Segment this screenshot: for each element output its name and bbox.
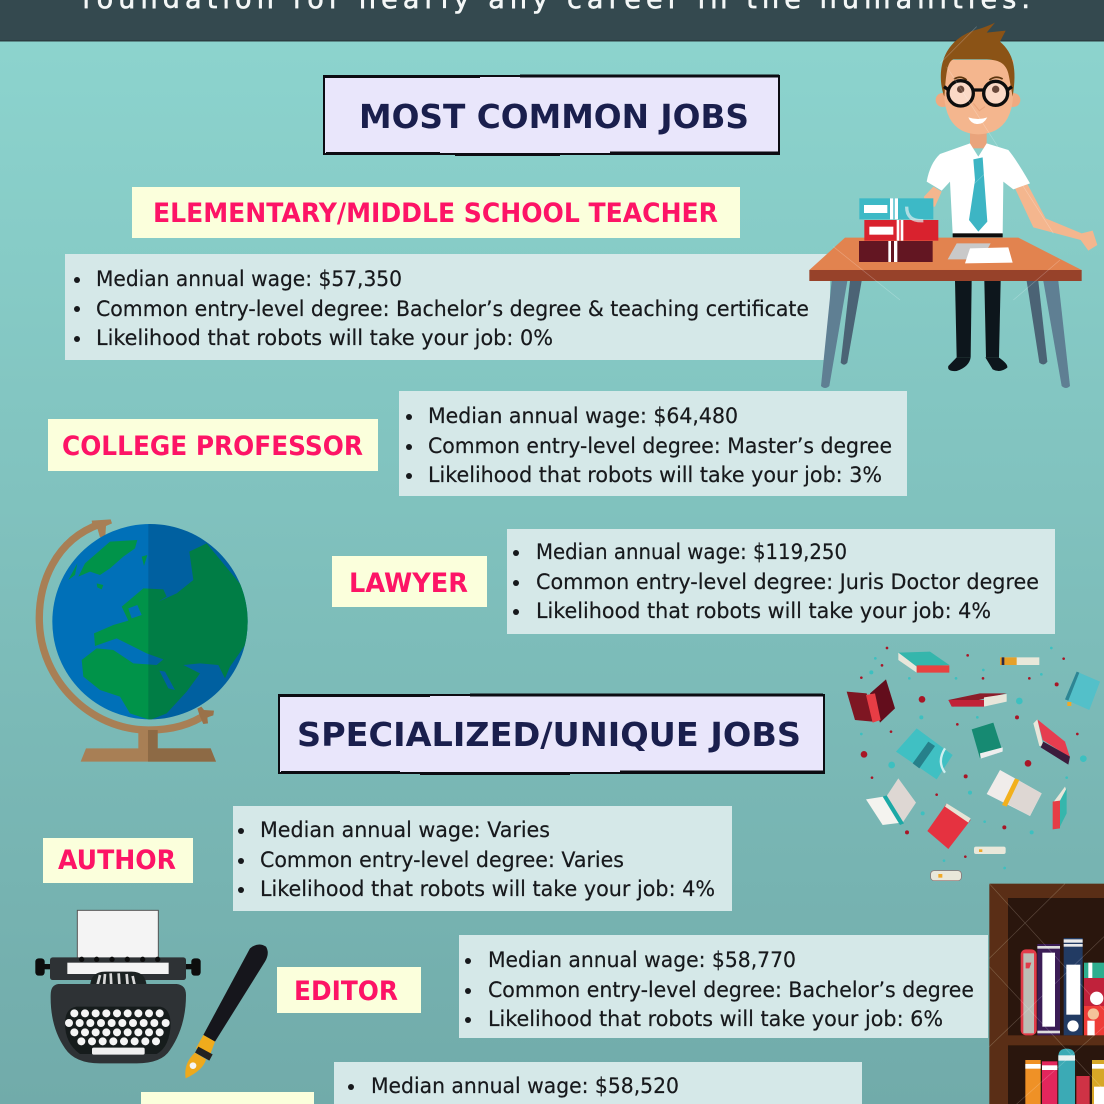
info panel: lawyer: Common entry-level degree: Juris Doctor degree	[536, 570, 1039, 594]
info panel: author: Common entry-level degree: Varies	[260, 848, 624, 872]
info panel: editor: Common entry-level degree: Bachelor’s degree	[488, 978, 974, 1002]
header banner	[0, 0, 1104, 42]
info panel: cropped at page bottom	[334, 1062, 862, 1104]
info panel: teacher: Common entry-level degree: Bachelor’s degree & teaching certificate	[96, 297, 809, 321]
job label: editor	[277, 967, 421, 1013]
heading: most common jobs	[324, 76, 779, 154]
info panel: editor: Median annual wage: $58,770	[488, 948, 796, 972]
info panel: author: Likelihood that robots will take your job: 4%	[260, 877, 715, 901]
info panel: college professor: Likelihood that robots will take your job: 3%	[428, 463, 882, 487]
info panel: college professor: Median annual wage: $64,480	[428, 404, 738, 428]
info panel: college professor: Common entry-level degree: Master’s degree	[428, 434, 892, 458]
info panel: author	[233, 806, 732, 911]
job label: lawyer: LAWYER	[349, 568, 468, 599]
info panel: editor: Likelihood that robots will take your job: 6%	[488, 1007, 943, 1031]
job label: editor: EDITOR	[294, 976, 398, 1007]
illustration: teacher at desk	[809, 23, 1097, 388]
info panel: lawyer: Likelihood that robots will take your job: 4%	[536, 599, 991, 623]
job label: lawyer	[332, 556, 487, 607]
info panel: cropped at page bottom: Median annual wage: $58,520	[371, 1074, 679, 1098]
info panel: teacher: Likelihood that robots will take your job: 0%	[96, 326, 553, 350]
info panel: teacher	[65, 254, 830, 360]
job label: author	[43, 838, 193, 883]
job label: author: AUTHOR	[58, 845, 176, 876]
heading: specialized/unique jobs	[279, 695, 824, 774]
info panel: lawyer	[507, 529, 1055, 634]
job label: elementary/middle school teacher: ELEMENTARY/MIDDLE SCHOOL TEACHER	[153, 198, 718, 229]
illustration: flying books	[847, 647, 1100, 881]
info panel: college professor	[399, 391, 907, 496]
heading: specialized/unique jobs: SPECIALIZED/UNIQUE JOBS	[297, 715, 801, 754]
job label: cropped at page bottom	[141, 1092, 314, 1104]
job label: elementary/middle school teacher	[132, 187, 740, 238]
job label: college professor: COLLEGE PROFESSOR	[62, 431, 363, 462]
illustration: bookshelf	[989, 884, 1104, 1104]
heading: most common jobs: MOST COMMON JOBS	[359, 97, 749, 136]
info panel: editor	[459, 935, 988, 1038]
job label: college professor	[48, 419, 378, 471]
illustration: typewriter	[35, 910, 201, 1063]
illustration: desk globe	[39, 519, 253, 762]
info panel: lawyer: Median annual wage: $119,250	[536, 540, 847, 564]
info panel: teacher: Median annual wage: $57,350	[96, 267, 402, 291]
info panel: author: Median annual wage: Varies	[260, 818, 550, 842]
illustration: fountain pen	[185, 945, 268, 1078]
